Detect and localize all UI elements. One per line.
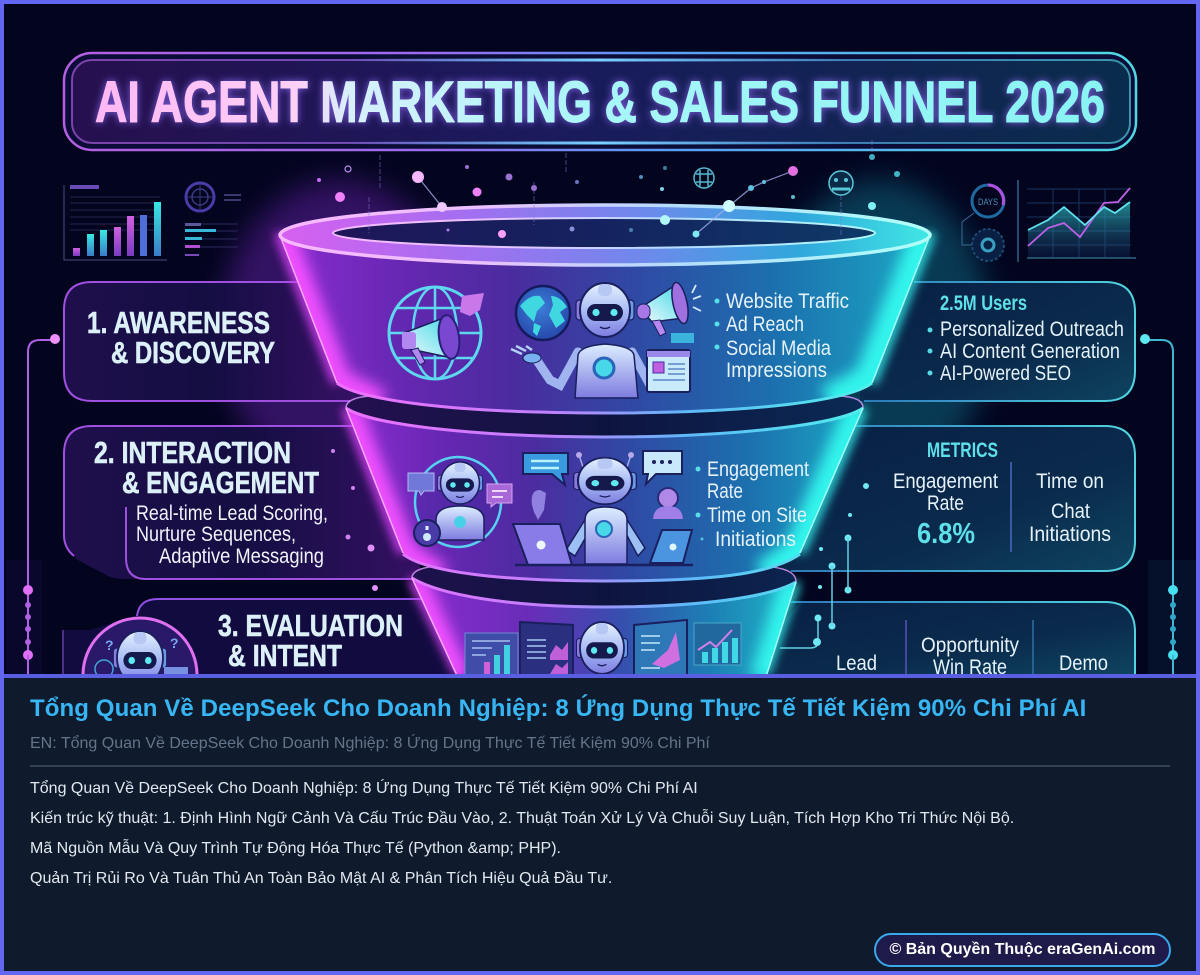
icon: megaphone (637, 281, 701, 336)
avatar: evaluation robot: ? (105, 637, 114, 653)
icon: robot at laptops with chat (513, 451, 693, 565)
list: stage 2 metrics: Rate (707, 480, 743, 503)
funnel rim (280, 205, 930, 265)
text block: stage 2 tactics: Nurture Sequences, (136, 523, 296, 546)
icon: network node ring (694, 168, 714, 188)
article summary: Kiến trúc kỹ thuật: 1. Định Hình Ngữ Cảnh Và Cấu Trúc Đầu Vào, 2. Thuật Toán Xử Lý Và Chuỗi Suy Luận, Tích Hợp Kho Tri Thức Nội Bộ. (30, 810, 1014, 827)
list: stage 1 tactics: AI Content Generation (940, 340, 1120, 363)
panel: stage 2 right (780, 426, 1135, 571)
line chart top right (1018, 180, 1136, 262)
list: stage 2 metrics (696, 458, 809, 551)
list: stage 1 channels: Social Media (726, 337, 831, 360)
text block: stage 2 tactics: Adaptive Messaging (159, 545, 324, 568)
mini bar chart top left (64, 185, 167, 260)
info panel (0, 674, 1200, 975)
panel: stage 1 left (64, 282, 350, 401)
icon: earth (516, 286, 570, 340)
list: stage 2 metrics: Engagement (707, 458, 809, 481)
metric: opportunity win rate (921, 634, 1019, 679)
list: stage 1 tactics: AI-Powered SEO (940, 362, 1071, 385)
metric: time on chat initiations (1029, 470, 1111, 546)
side circuit left (23, 334, 60, 674)
metric: engagement rate: 6.8% (917, 518, 975, 550)
heading: interaction and engagement: 2. INTERACTION (94, 435, 291, 470)
article summary: Quản Trị Rủi Ro Và Tuân Thủ An Toàn Bảo Mật AI & Phân Tích Hiệu Quả Đầu Tư. (30, 870, 612, 887)
list: stage 1 channels: Impressions (726, 359, 827, 382)
heading: metrics: METRICS (927, 439, 998, 462)
list: stage 1 tactics: Personalized Outreach (940, 318, 1124, 341)
particles above funnel (317, 140, 900, 238)
list: stage 2 metrics: Time on Site (707, 504, 807, 527)
mini gauges top right (962, 185, 1004, 261)
heading: evaluation and intent: & INTENT (228, 638, 342, 673)
panel: stage 1 right (860, 282, 1135, 401)
infographic artwork (4, 4, 1196, 674)
list: stage 1 tactics (928, 318, 1124, 385)
metric: time on chat initiations: Time on (1036, 470, 1104, 493)
icon: report panels and robot (465, 620, 741, 680)
text block: stage 2 tactics (136, 502, 328, 568)
list: stage 1 channels (714, 290, 849, 382)
funnel stage 3 (412, 566, 796, 680)
heading: interaction and engagement (94, 435, 319, 500)
metric: engagement rate (893, 470, 998, 550)
mini gauges top right: DAYS (978, 197, 998, 207)
funnel stage 2 (346, 396, 863, 581)
icon: globe with megaphone (389, 287, 484, 379)
icon: web page card (647, 333, 694, 392)
heading: awareness and discovery (87, 305, 275, 370)
article title: Tổng Quan Về DeepSeek Cho Doanh Nghiệp: 8 Ứng Dụng Thực Tế Tiết Kiệm 90% Chi Phí AI (30, 695, 1086, 722)
avatar: evaluation robot: ? (170, 635, 179, 651)
avatar: evaluation robot (83, 618, 197, 732)
article summary: Mã Nguồn Mẫu Và Quy Trình Tự Động Hóa Thực Tế (Python &amp; PHP). (30, 840, 561, 857)
side circuit right (1140, 334, 1178, 674)
list: stage 1 channels: Website Traffic (726, 290, 849, 313)
metric: engagement rate: Rate (927, 492, 964, 515)
panel: stage 2 left (64, 426, 420, 591)
panel: stage 3 right (740, 602, 1135, 679)
english subtitle: EN: Tổng Quan Về DeepSeek Cho Doanh Nghiệp: 8 Ứng Dụng Thực Tế Tiết Kiệm 90% Chi Phí (30, 735, 710, 752)
metric: opportunity win rate: Opportunity (921, 634, 1019, 657)
article summary (30, 779, 1014, 887)
heading: evaluation and intent: 3. EVALUATION (218, 608, 403, 643)
panel: stage 3 left (63, 599, 480, 732)
heading: awareness and discovery: 1. AWARENESS (87, 305, 270, 340)
background glow (6, 180, 1198, 674)
metric: time on chat initiations: Chat (1051, 500, 1090, 523)
icon: main robot (511, 283, 650, 398)
list: stage 1 channels: Ad Reach (726, 313, 804, 336)
title banner (64, 53, 1136, 150)
heading: awareness and discovery: & DISCOVERY (111, 335, 275, 370)
circuit nodes between panels (780, 534, 852, 648)
mini gauge and progress bars top left (185, 183, 241, 256)
funnel outer glow (279, 233, 931, 674)
heading: interaction and engagement: & ENGAGEMENT (122, 465, 319, 500)
metric: engagement rate: Engagement (893, 470, 998, 493)
funnel stage 1 (279, 205, 931, 413)
list: stage 2 metrics: Initiations (715, 528, 796, 551)
heading: evaluation and intent (218, 608, 403, 673)
metric: users: 2.5M Users (940, 292, 1027, 315)
background (0, 0, 1200, 674)
copyright badge (874, 933, 1171, 967)
icon: assistant robot in ring (408, 457, 512, 547)
text block: stage 2 tactics: Real-time Lead Scoring, (136, 502, 328, 525)
metric: time on chat initiations: Initiations (1029, 523, 1111, 546)
article summary: Tổng Quan Về DeepSeek Cho Doanh Nghiệp: 8 Ứng Dụng Thực Tế Tiết Kiệm 90% Chi Phí AI (30, 780, 698, 797)
icon: users ring (829, 171, 853, 195)
copyright badge: © Bản Quyền Thuộc eraGenAi.com (889, 941, 1156, 958)
